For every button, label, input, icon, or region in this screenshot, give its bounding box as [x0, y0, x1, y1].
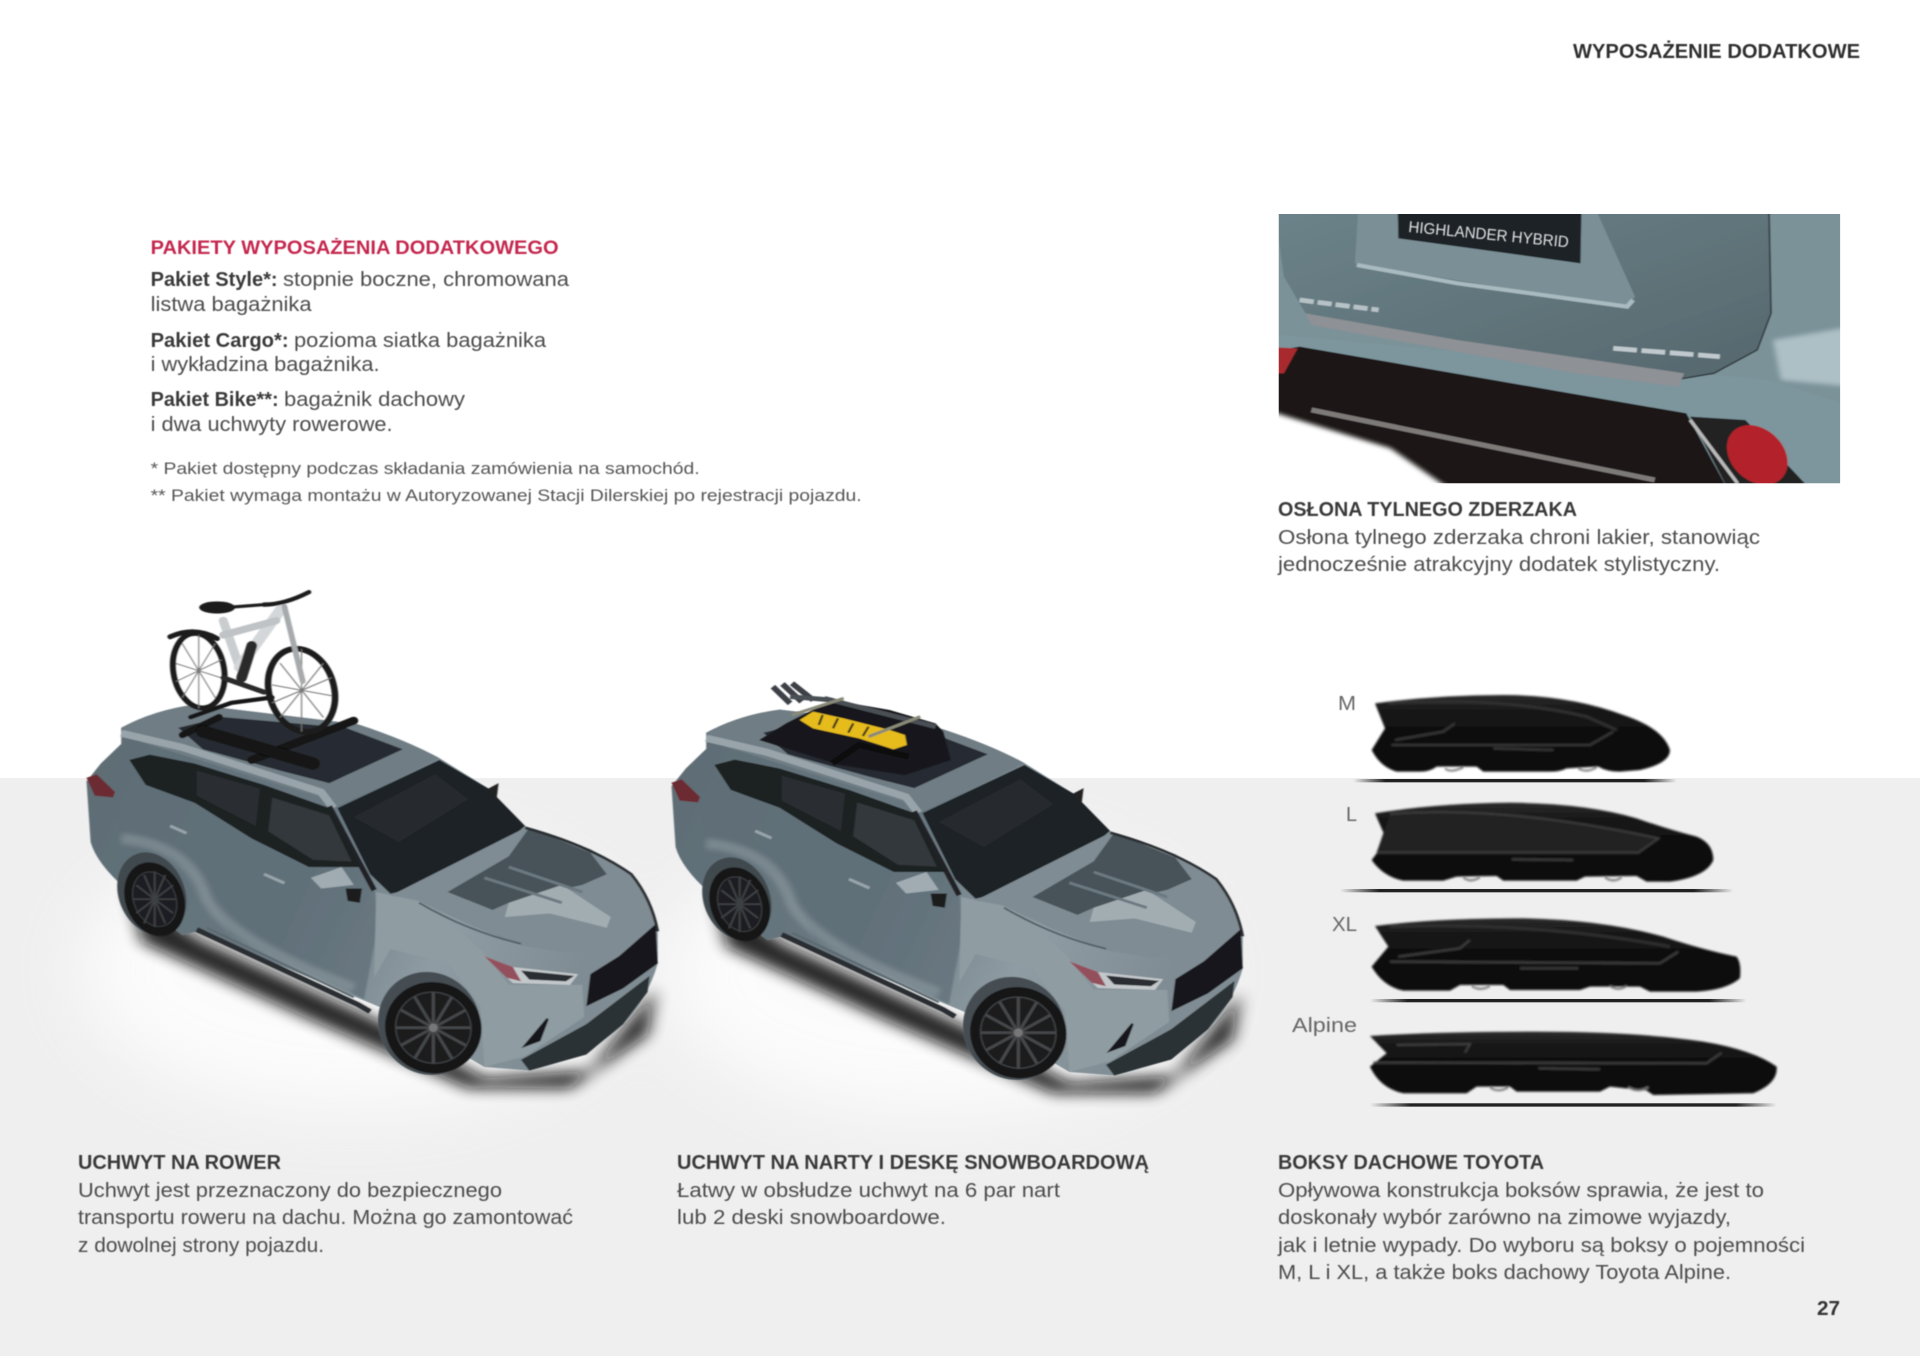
- package: style: [151, 268, 570, 316]
- caption: roof boxes: Opływowa konstrukcja boksów sprawia, że jest to: [1278, 1179, 1764, 1202]
- box M: [1353, 695, 1677, 782]
- package: bike: [151, 388, 466, 436]
- caption: bike holder: Uchwyt jest przeznaczony do bezpiecznego: [78, 1179, 502, 1202]
- package: cargo: [151, 329, 547, 376]
- photo: rear bumper protector: [1278, 214, 1840, 484]
- caption: rear bumper protector: Osłona tylnego zderzaka chroni lakier, stanowiąc: [1278, 526, 1760, 549]
- package: style: stopnie boczne, chromowana: [283, 268, 570, 291]
- white halo behind cars: [80, 830, 1205, 1115]
- size labels: Alpine: [1292, 1015, 1357, 1037]
- package: bike: Pakiet Bike**:: [151, 388, 279, 411]
- footnotes: * Pakiet dostępny podczas składania zamówienia na samochód.: [151, 460, 700, 478]
- package: cargo: pozioma siatka bagażnika: [294, 329, 547, 352]
- caption: roof boxes: M, L i XL, a także boks dachowy Toyota Alpine.: [1278, 1261, 1731, 1284]
- package: style: listwa bagażnika: [151, 293, 312, 316]
- header label: WYPOSAŻENIE DODATKOWE: [1573, 40, 1860, 63]
- panel: equipment packages text: [151, 238, 862, 505]
- grey floor band: [0, 778, 1920, 1356]
- size labels: XL: [1332, 914, 1357, 936]
- roof boxes: sizes: [1340, 695, 1777, 1107]
- bicycle: [168, 592, 343, 737]
- size labels: L: [1346, 804, 1357, 826]
- box Alpine: [1370, 1032, 1777, 1107]
- page number: 27: [1817, 1298, 1840, 1320]
- caption: ski holder: Łatwy w obsłudze uchwyt na 6 par nart: [677, 1179, 1060, 1202]
- package: style: Pakiet Style*:: [151, 268, 278, 291]
- caption: roof boxes: doskonały wybór zarówno na zimowe wyjazdy,: [1278, 1206, 1731, 1229]
- car with bike carrier: [87, 592, 658, 1088]
- ski and snowboard rack: [760, 683, 951, 775]
- size labels: [1292, 693, 1357, 1037]
- caption: bike holder: [78, 1152, 573, 1257]
- caption: ski holder: lub 2 deski snowboardowe.: [677, 1206, 946, 1229]
- car with ski and snowboard carrier: [672, 710, 1243, 1093]
- size labels: M: [1338, 693, 1356, 715]
- caption: roof boxes: jak i letnie wypady. Do wyboru są boksy o pojemności: [1277, 1234, 1805, 1257]
- caption: rear bumper protector: [1277, 499, 1760, 576]
- caption: roof boxes: [1277, 1152, 1805, 1284]
- caption: bike holder: z dowolnej strony pojazdu.: [78, 1234, 324, 1257]
- heading: packages: PAKIETY WYPOSAŻENIA DODATKOWEGO: [151, 238, 559, 259]
- caption: ski holder: UCHWYT NA NARTY I DESKĘ SNOWBOARDOWĄ: [677, 1152, 1149, 1174]
- roof rack: [182, 697, 354, 763]
- caption: rear bumper protector: OSŁONA TYLNEGO ZDERZAKA: [1278, 499, 1577, 521]
- caption: roof boxes: BOKSY DACHOWE TOYOTA: [1278, 1152, 1544, 1174]
- box L: [1340, 803, 1733, 892]
- package: cargo: i wykładzina bagażnika.: [151, 353, 380, 376]
- box XL: [1370, 918, 1747, 1002]
- package: cargo: Pakiet Cargo*:: [151, 329, 289, 352]
- caption: bike holder: UCHWYT NA ROWER: [78, 1152, 282, 1174]
- footnotes: ** Pakiet wymaga montażu w Autoryzowanej Stacji Dilerskiej po rejestracji pojazdu.: [151, 487, 862, 505]
- package: bike: i dwa uchwyty rowerowe.: [151, 413, 393, 436]
- caption: bike holder: transportu roweru na dachu. Można go zamontować: [78, 1206, 573, 1229]
- license plate text: HIGHLANDER HYBRID: [1408, 219, 1570, 251]
- caption: ski holder: [677, 1152, 1149, 1229]
- package: bike: bagażnik dachowy: [284, 388, 466, 411]
- footnotes: [151, 460, 862, 505]
- caption: rear bumper protector: jednocześnie atrakcyjny dodatek stylistyczny.: [1277, 553, 1720, 576]
